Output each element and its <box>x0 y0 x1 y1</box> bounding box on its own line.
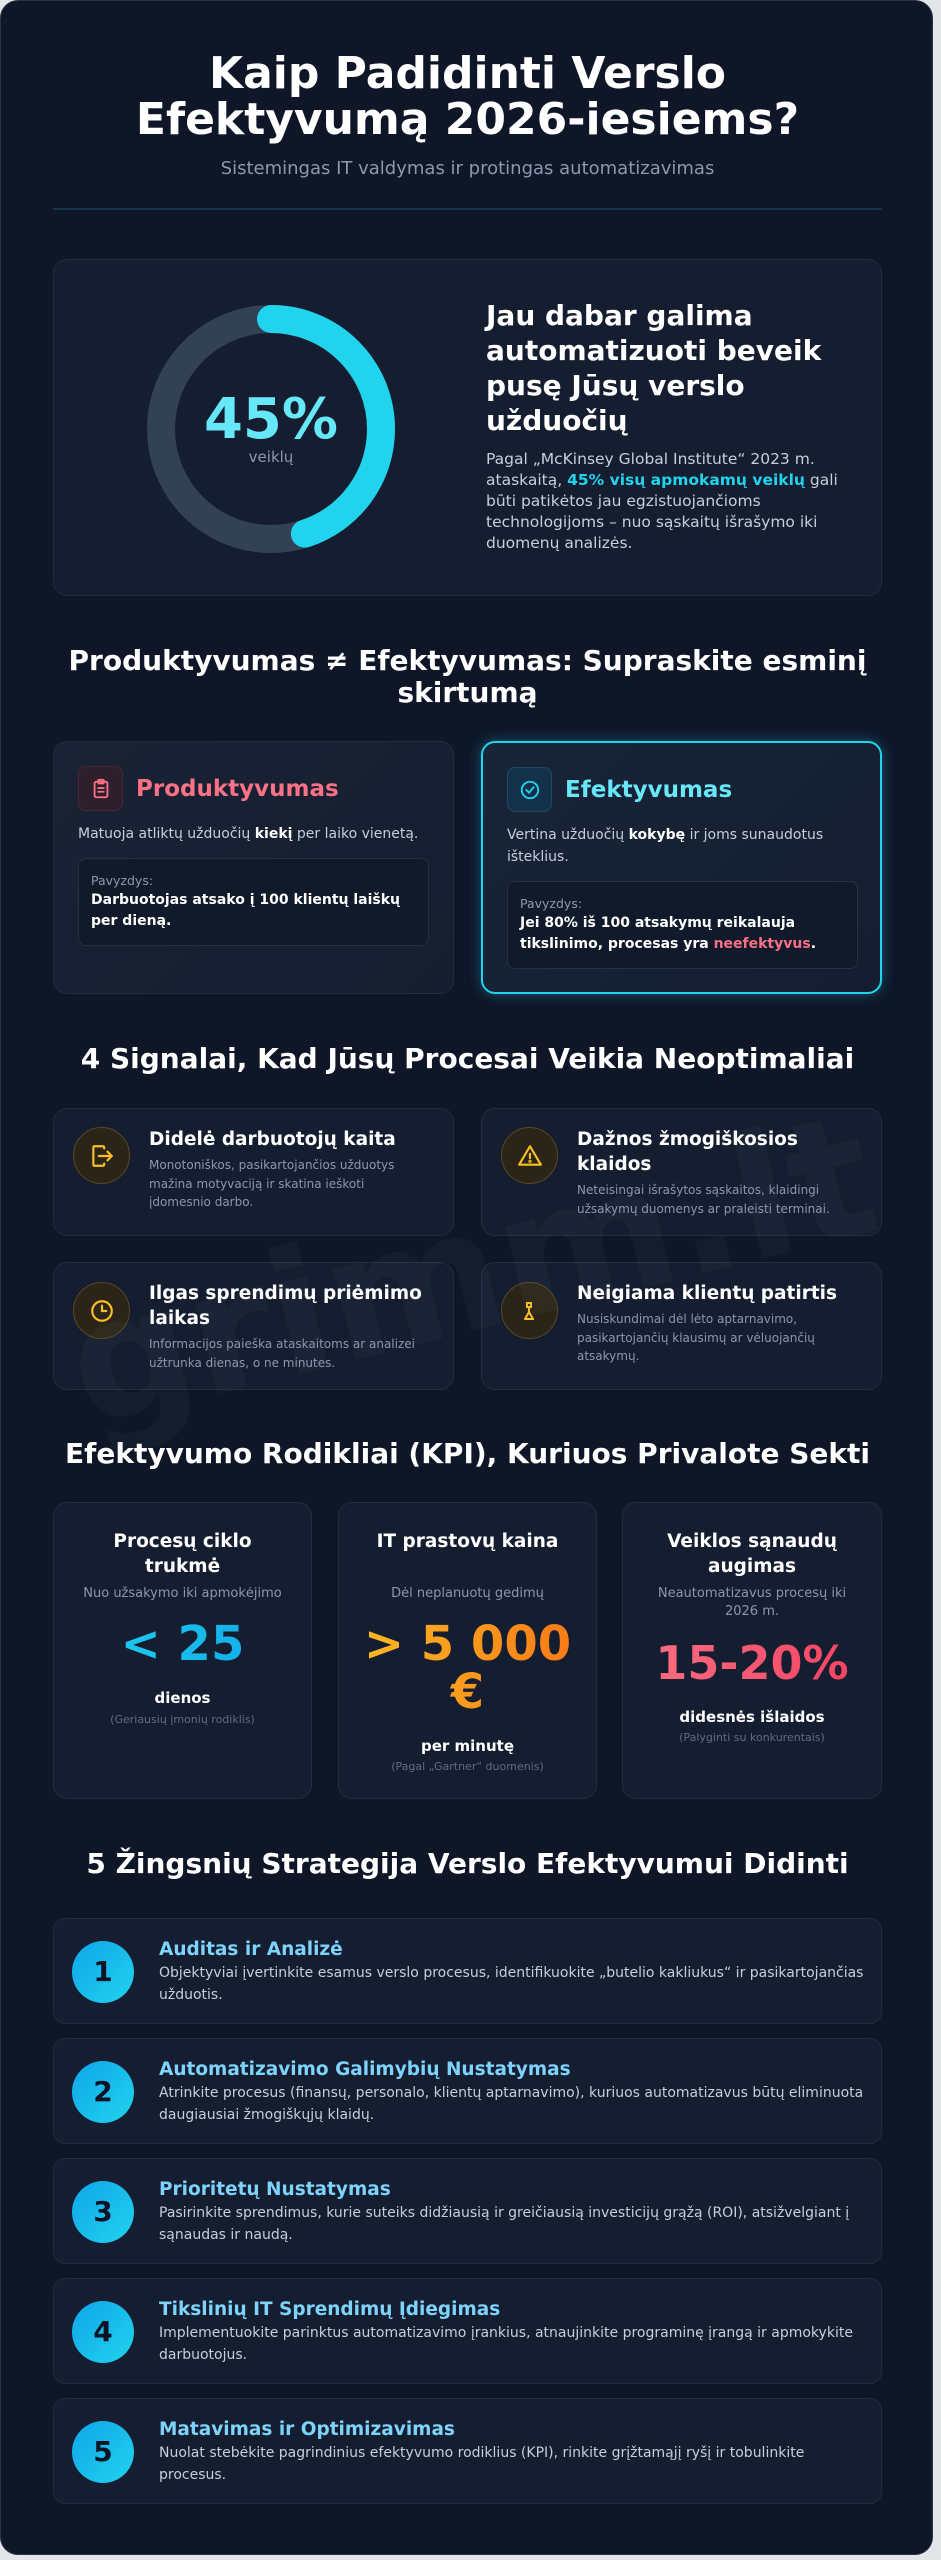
kpi card: cycle: trukmė <box>145 1556 220 1577</box>
step 2: Atrinkite procesus (finansų, personalo, klientų aptarnavimo), kuriuos automatizavus būtų eliminuota <box>159 2085 863 2101</box>
kpi card: cycle: Procesų ciklo <box>113 1531 252 1552</box>
step 5: Nuolat stebėkite pagrindinius efektyvumo rodiklius (KPI), rinkite grįžtamąjį ryšį ir tobulinkite <box>159 2445 804 2461</box>
signal card: customer: atsakymų. <box>577 1349 639 1363</box>
kpi card: downtime: per minutę <box>421 1737 514 1755</box>
step 4: Tikslinių IT Sprendimų Įdiegimas <box>159 2299 500 2320</box>
icon: customer <box>501 1282 558 1339</box>
signal card: customer: pasikartojančių klausimų ar vėluojančių <box>577 1330 815 1344</box>
signal card: errors: Dažnos žmogiškosios <box>577 1129 798 1150</box>
step 3: 3 <box>93 2195 113 2228</box>
kpi value: < 25 <box>121 1616 244 1672</box>
example box <box>78 858 429 946</box>
example box: tikslinimo, procesas yra neefektyvus. <box>520 936 816 952</box>
card description <box>507 827 823 865</box>
signal card: turnover: Didelė darbuotojų kaita <box>149 1129 396 1150</box>
step 1: 1 <box>93 1955 113 1988</box>
kpi card: costs: Neautomatizavus procesų iki <box>658 1586 846 1601</box>
title: Efektyvumą 2026-iesiems? <box>136 94 799 145</box>
step 1: Objektyviai įvertinkite esamus verslo procesus, identifikuokite „butelio kakliukus“ ir pasikartojančias <box>159 1965 863 1981</box>
step 5: 5 <box>93 2435 113 2468</box>
signal card: turnover <box>53 1108 454 1236</box>
hero heading <box>484 299 822 437</box>
signal card: errors: užsakymų duomenys ar praleisti terminai. <box>577 1202 830 1216</box>
signal card: errors: klaidos <box>577 1154 651 1175</box>
kpi card: costs <box>622 1502 882 1799</box>
kpi card: cycle: (Geriausių įmonių rodiklis) <box>110 1713 255 1726</box>
step 5: procesus. <box>159 2467 226 2483</box>
hero text: ataskaitą, 45% visų apmokamų veiklų gali <box>486 471 838 489</box>
signal card: decisions: laikas <box>149 1308 210 1329</box>
signal card: errors: Neteisingai išrašytos sąskaitos, klaidingi <box>577 1183 819 1197</box>
icon: exit <box>73 1127 130 1184</box>
kpi card: downtime: IT prastovų kaina <box>377 1531 558 1552</box>
kpi card: costs: augimas <box>708 1556 796 1577</box>
title <box>136 48 799 145</box>
step 3: Prioritetų Nustatymas <box>159 2179 391 2200</box>
signal card: decisions: Ilgas sprendimų priėmimo <box>149 1283 422 1304</box>
step 5: Matavimas ir Optimizavimas <box>159 2419 455 2440</box>
hero heading: pusę Jūsų verslo <box>486 369 745 402</box>
hero text <box>486 450 838 552</box>
example box: per dieną. <box>91 913 171 929</box>
donut chart 45% <box>147 305 395 553</box>
heading: productivity vs efficiency: skirtumą <box>397 676 538 709</box>
step 1: Auditas ir Analizė <box>159 1939 343 1960</box>
step 4: Implementuokite parinktus automatizavimo įrankius, atnaujinkite programinę įrangą ir apmokykite <box>159 2325 853 2341</box>
step 2 <box>53 2038 882 2144</box>
hero text: būti patikėtos jau egzistuojančioms <box>486 492 761 510</box>
card description: Matuoja atliktų užduočių kiekį per laiko vienetą. <box>78 826 418 842</box>
step 2: daugiausiai žmogiškųjų klaidų. <box>159 2107 374 2123</box>
heading: KPI: Efektyvumo Rodikliai (KPI), Kuriuos Privalote Sekti <box>65 1437 870 1470</box>
signal card: errors <box>481 1108 882 1236</box>
icon: warning <box>501 1127 558 1184</box>
panel: efektyvumas <box>481 741 882 994</box>
card description: Vertina užduočių kokybę ir joms sunaudotus <box>507 827 823 843</box>
example box <box>507 881 858 969</box>
heading: steps: 5 Žingsnių Strategija Verslo Efektyvumui Didinti <box>86 1847 849 1880</box>
kpi value <box>54 1620 311 1668</box>
icon: clipboard <box>78 766 123 811</box>
kpi value: > 5 000 <box>364 1616 571 1672</box>
step 2: Automatizavimo Galimybių Nustatymas <box>159 2059 571 2080</box>
kpi card: costs: 2026 m. <box>725 1604 779 1619</box>
signal card: decisions: Informacijos paieška ataskaitoms ar analizei <box>149 1337 415 1351</box>
kpi value: € <box>451 1664 484 1720</box>
signal card: turnover: įdomesnio darbo. <box>149 1195 253 1209</box>
panel: produktyvumas <box>53 741 454 994</box>
step 4: darbuotojus. <box>159 2347 247 2363</box>
example box: Jei 80% iš 100 atsakymų reikalauja <box>520 915 795 931</box>
kpi card: downtime: (Pagal „Gartner“ duomenis) <box>391 1760 544 1773</box>
step 3: Pasirinkite sprendimus, kurie suteiks didžiausią ir greičiausią investicijų grąžą (ROI), atsižvelgiant į <box>159 2205 849 2221</box>
signal card: decisions: užtrunka dienas, o ne minutes. <box>149 1356 335 1370</box>
step 4: 4 <box>93 2315 113 2348</box>
hero heading: Jau dabar galima <box>486 299 753 332</box>
kpi card: downtime: Dėl neplanuotų gedimų <box>391 1586 544 1601</box>
hero text: duomenų analizės. <box>486 534 632 552</box>
signal card: customer: Neigiama klientų patirtis <box>577 1283 837 1304</box>
signal card: customer <box>481 1262 882 1390</box>
subtitle: Sistemingas IT valdymas ir protingas automatizavimas <box>221 158 714 179</box>
card title: Produktyvumas <box>136 776 339 802</box>
hero heading: užduočių <box>486 404 628 437</box>
heading: productivity vs efficiency: Produktyvumas ≠ Efektyvumas: Supraskite esminį <box>69 644 866 677</box>
panel: hero stat <box>53 259 882 596</box>
kpi value <box>339 1620 596 1716</box>
donut chart 45%: veiklų <box>249 448 294 466</box>
hero text: technologijoms – nuo sąskaitų išrašymo iki <box>486 513 817 531</box>
step 1: užduotis. <box>159 1987 223 2003</box>
hero heading: automatizuoti beveik <box>486 334 821 367</box>
example box: Darbuotojas atsako į 100 klientų laiškų <box>91 892 400 908</box>
signal card: customer: Nusiskundimai dėl lėto aptarnavimo, <box>577 1312 797 1326</box>
signal card: turnover: Monotoniškos, pasikartojančios užduotys <box>149 1158 394 1172</box>
step 1 <box>53 1918 882 2024</box>
icon: clock <box>73 1282 130 1339</box>
watermark: grimm.lt <box>48 1075 894 1467</box>
card description: išteklius. <box>507 849 569 865</box>
kpi value <box>623 1639 881 1687</box>
card title: Efektyvumas <box>565 777 732 803</box>
example box: Pavyzdys: <box>520 896 582 911</box>
step 3 <box>53 2158 882 2264</box>
step 4 <box>53 2278 882 2384</box>
heading: signals: 4 Signalai, Kad Jūsų Procesai Veikia Neoptimaliai <box>81 1042 854 1075</box>
step 2: 2 <box>93 2075 113 2108</box>
kpi card: downtime <box>338 1502 597 1799</box>
signal card: decisions <box>53 1262 454 1390</box>
kpi card: cycle: dienos <box>155 1689 210 1707</box>
example box: Pavyzdys: <box>91 873 153 888</box>
icon: check circle <box>507 767 552 812</box>
kpi card: costs: Veiklos sąnaudų <box>667 1531 837 1552</box>
title: Kaip Padidinti Verslo <box>209 48 726 99</box>
kpi card: costs: (Palyginti su konkurentais) <box>679 1731 825 1744</box>
hero text: Pagal „McKinsey Global Institute“ 2023 m. <box>486 450 815 468</box>
heading: productivity vs efficiency <box>69 644 867 709</box>
kpi value: 15-20% <box>655 1636 849 1690</box>
kpi card: cycle <box>53 1502 312 1799</box>
signal card: turnover: mažina motyvaciją ir skatina ieškoti <box>149 1176 364 1190</box>
step 5 <box>53 2398 882 2504</box>
step 3: sąnaudas ir naudą. <box>159 2227 293 2243</box>
kpi card: cycle: Nuo užsakymo iki apmokėjimo <box>83 1586 282 1601</box>
donut chart 45%: 45% <box>204 387 338 452</box>
kpi card: costs: didesnės išlaidos <box>679 1708 825 1726</box>
